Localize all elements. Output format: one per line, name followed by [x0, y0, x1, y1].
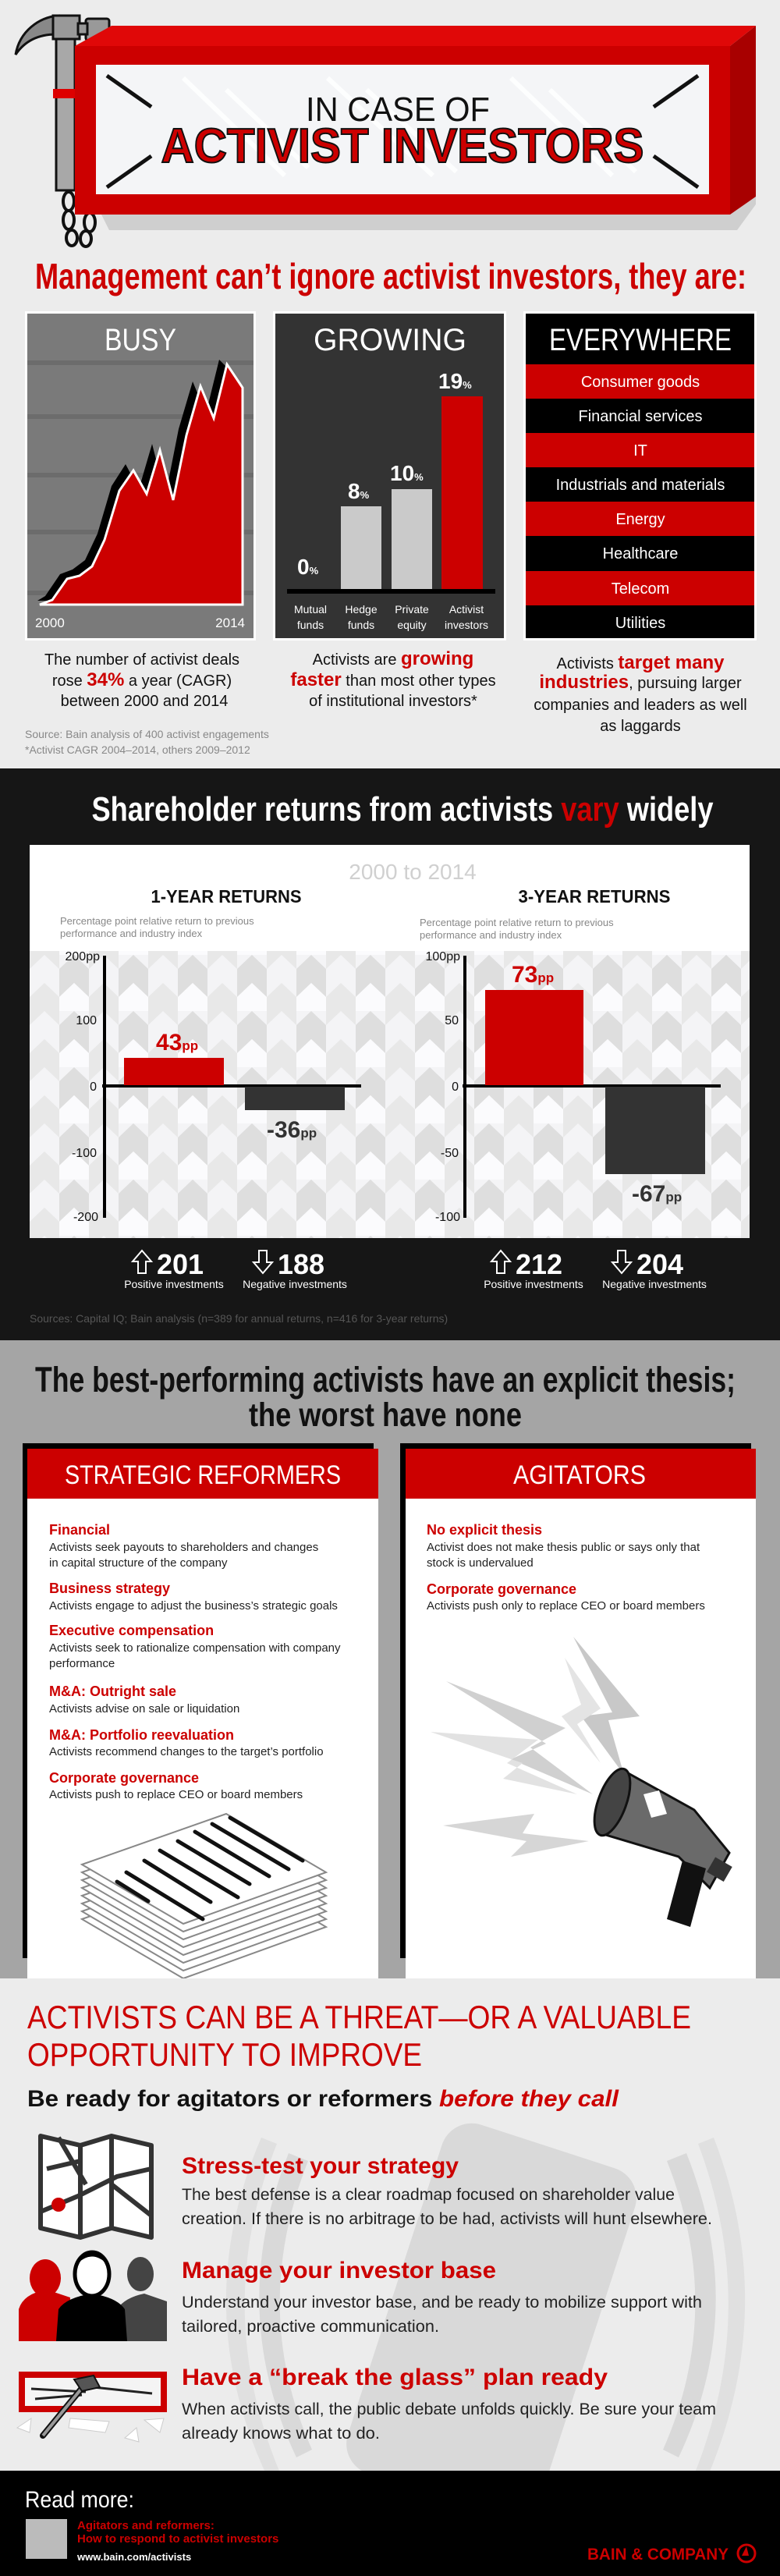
background: action section	[0, 1978, 780, 2471]
subheading: be ready: Be ready for agitators or reformers before they call	[27, 2086, 619, 2112]
list: reformer theses: Activists push to replace CEO or board members	[49, 1788, 303, 1801]
item: manage investor base: Manage your investor base	[182, 2258, 496, 2283]
chart: 3-year returns: 73pp	[512, 962, 554, 988]
item: stress-test: Stress-test your strategy	[182, 2153, 459, 2179]
icon: stack of papers	[82, 1814, 326, 1978]
chart: 1-year returns: 43pp	[156, 1030, 198, 1056]
footer	[0, 2471, 780, 2576]
icon: lightning bolts	[431, 1637, 640, 1857]
chart: 1-year returns: 0	[90, 1080, 97, 1094]
list: industries	[526, 364, 754, 632]
heading: threat or opportunity: OPPORTUNITY TO IMPROVE	[27, 2036, 422, 2073]
chart: 3-year returns: -50	[441, 1147, 459, 1160]
chart: 3-year returns: -100	[435, 1211, 460, 1224]
icon: megaphone	[587, 1765, 732, 1927]
stats: investment counts: 212	[516, 1248, 562, 1280]
source note: top	[25, 728, 269, 756]
bar chart: growth by investor type: 8%	[348, 479, 370, 503]
stats: investment counts: Positive investments	[124, 1278, 224, 1290]
item: stress-test: The best defense is a clear roadmap focused on shareholder value	[182, 2186, 675, 2204]
background: returns section	[0, 768, 780, 1340]
caption: busy: The number of activist deals	[44, 651, 239, 669]
caption: busy: rose 34% a year (CAGR)	[52, 669, 232, 690]
heading: everywhere: EVERYWHERE	[549, 323, 732, 357]
list: reformer theses: Executive compensation	[49, 1623, 214, 1638]
list: industries: IT	[633, 442, 647, 459]
list: agitator traits: Activists push only to replace CEO or board members	[427, 1599, 705, 1613]
footer: Read more:	[25, 2487, 134, 2513]
caption: growing: of institutional investors*	[309, 693, 477, 710]
caption: everywhere: Activists target many	[557, 652, 725, 673]
list: industries: Financial services	[579, 408, 702, 425]
icon: people	[19, 2251, 167, 2341]
item: break the glass: already knows what to do.	[182, 2425, 380, 2443]
stats: investment counts: Negative investments	[602, 1278, 707, 1290]
item: break the glass	[182, 2365, 716, 2443]
list: reformer theses: Activists engage to adjust the business’s strategic goals	[49, 1599, 338, 1613]
chart: 3-year returns: 3-YEAR RETURNS	[518, 886, 671, 907]
item: manage investor base: tailored, proactive communication.	[182, 2318, 439, 2336]
watermark: phone	[226, 2115, 745, 2527]
chart: 1-year returns: -36pp	[267, 1117, 317, 1143]
bar chart: growth by investor type: 10%	[390, 461, 424, 485]
title line 1: IN CASE OF	[306, 90, 490, 129]
caption: everywhere: industries, pursuing larger	[539, 672, 742, 693]
bar chart: growth by investor type: 0%	[297, 555, 319, 579]
heading: threat or opportunity: ACTIVISTS CAN BE A THREAT—OR A VALUABLE	[27, 1999, 691, 2035]
list: reformer theses: Activists recommend changes to the target’s portfolio	[49, 1745, 324, 1758]
item: manage investor base	[182, 2258, 702, 2336]
chart: 1-year returns: -100	[72, 1147, 97, 1160]
heading: shareholder returns: Shareholder returns from activists vary widely	[92, 790, 714, 829]
panel: busy: 2014	[215, 616, 245, 630]
source note: returns: Sources: Capital IQ; Bain analysis (n=389 for annual returns, n=416 for 3-year returns)	[30, 1312, 448, 1325]
heading: best-performing activists	[35, 1360, 736, 1434]
list: industries: Utilities	[615, 615, 665, 632]
stats: investment counts: 188	[278, 1248, 324, 1280]
panel: agitators: AGITATORS	[513, 1460, 646, 1490]
title sign: in case of activist investors	[75, 26, 756, 230]
title line 2: ACTIVIST INVESTORS	[161, 119, 644, 173]
icon: break the glass	[17, 2372, 167, 2442]
bar chart: growth by investor type: investors	[445, 619, 488, 631]
chart: 3-year returns: 100pp	[426, 950, 460, 963]
link text: Agitators and reformers:	[77, 2519, 214, 2532]
stats: investment counts: 201	[157, 1248, 204, 1280]
chart: 1-year returns: -200	[73, 1211, 98, 1224]
list: agitator traits: stock is undervalued	[427, 1556, 534, 1570]
icon: map	[41, 2136, 151, 2237]
item: break the glass: Have a “break the glass” plan ready	[182, 2365, 608, 2390]
bar chart: growth by investor type	[287, 369, 495, 631]
panel: strategic reformers: STRATEGIC REFORMERS	[65, 1460, 341, 1490]
caption: everywhere	[534, 652, 747, 735]
panel: agitators	[400, 1443, 756, 1979]
list: industries: Telecom	[612, 580, 669, 598]
caption: busy: between 2000 and 2014	[61, 693, 228, 710]
item: manage investor base: Understand your investor base, and be ready to mobilize support with	[182, 2294, 702, 2312]
list: reformer theses: Activists seek to rationalize compensation with company	[49, 1641, 341, 1655]
background: thesis section	[0, 1340, 780, 1978]
background: top section	[0, 0, 780, 768]
thumbnail	[26, 2519, 67, 2559]
chart: 1-year returns: Percentage point relative return to previous	[60, 915, 254, 927]
link text	[76, 2519, 278, 2563]
chart: 3-year returns: Percentage point relative return to previous	[420, 917, 614, 928]
list: reformer theses: Corporate governance	[49, 1770, 199, 1786]
list: reformer theses: M&A: Outright sale	[49, 1684, 176, 1699]
list: reformer theses: Financial	[49, 1522, 110, 1538]
area chart: activist deals	[37, 360, 243, 605]
panel: everywhere	[523, 311, 757, 640]
list: industries: Consumer goods	[581, 374, 700, 391]
list: reformer theses	[49, 1522, 341, 1801]
chart: 3-year returns: 50	[445, 1014, 459, 1027]
stats: investment counts: Positive investments	[484, 1278, 583, 1290]
chart: 1-year returns: performance and industry index	[60, 928, 203, 939]
caption: everywhere: as laggards	[600, 718, 681, 735]
list: industries: Industrials and materials	[556, 477, 725, 494]
list: agitator traits: Corporate governance	[427, 1581, 576, 1597]
caption: growing: Activists are growing	[313, 648, 473, 669]
list: industries: Healthcare	[603, 545, 678, 562]
chart: 1-year returns: 1-YEAR RETURNS	[151, 886, 301, 907]
panel: strategic reformers	[23, 1443, 378, 1979]
list: reformer theses: M&A: Portfolio reevaluation	[49, 1727, 234, 1743]
caption: growing	[290, 648, 496, 710]
caption: busy	[44, 651, 239, 710]
list: agitator traits	[427, 1522, 705, 1613]
link text: www.bain.com/activists	[76, 2551, 191, 2563]
item: stress-test: creation. If there is no arbitrage to be had, activists will hunt elsewhere.	[182, 2210, 712, 2228]
link text: How to respond to activist investors	[77, 2532, 278, 2546]
bar chart: growth by investor type: funds	[348, 619, 374, 631]
chart: 1-year returns	[60, 886, 361, 1224]
chart: 1-year returns: 100	[76, 1014, 97, 1027]
panel: returns chart	[30, 845, 750, 1238]
heading: busy: BUSY	[105, 323, 176, 357]
heading: threat or opportunity	[27, 1999, 691, 2073]
heading: best-performing activists: the worst have none	[249, 1396, 522, 1434]
item: stress-test	[182, 2153, 712, 2228]
panel: busy	[25, 311, 256, 640]
chart: 3-year returns	[420, 886, 721, 1224]
bar chart: growth by investor type: Activist	[449, 603, 484, 616]
source note: top: Source: Bain analysis of 400 activist engagements	[25, 728, 269, 740]
source note: top: *Activist CAGR 2004–2014, others 2009–2012	[25, 743, 250, 756]
item: break the glass: When activists call, the public debate unfolds quickly. Be sure your team	[182, 2400, 716, 2418]
chart: 3-year returns: -67pp	[632, 1181, 682, 1207]
chart: 3-year returns: 0	[452, 1080, 459, 1094]
bar chart: growth by investor type: Mutual	[294, 603, 327, 616]
list: industries: Energy	[615, 511, 665, 528]
panel: growing	[273, 311, 506, 640]
heading: growing: GROWING	[314, 323, 466, 357]
label: period: 2000 to 2014	[349, 860, 477, 884]
bar chart: growth by investor type: Hedge	[345, 603, 378, 616]
bar chart: growth by investor type: funds	[297, 619, 324, 631]
list: reformer theses: in capital structure of the company	[49, 1556, 228, 1570]
list: agitator traits: No explicit thesis	[427, 1522, 542, 1538]
bar chart: growth by investor type: equity	[397, 619, 427, 631]
icon: hammer and chain	[16, 16, 109, 247]
list: agitator traits: Activist does not make thesis public or says only that	[427, 1541, 700, 1554]
chart: 1-year returns: 200pp	[66, 950, 100, 963]
list: reformer theses: Activists advise on sale or liquidation	[49, 1702, 239, 1716]
stats: investment counts: Negative investments	[243, 1278, 347, 1290]
caption: growing: faster than most other types	[290, 669, 496, 690]
list: reformer theses: Activists seek payouts to shareholders and changes	[49, 1541, 318, 1554]
logo: bain & company: BAIN & COMPANY	[587, 2546, 729, 2564]
caption: everywhere: companies and leaders as well	[534, 697, 747, 714]
bar chart: growth by investor type: Private	[395, 603, 429, 616]
list: reformer theses: performance	[49, 1657, 115, 1670]
list: reformer theses: Business strategy	[49, 1581, 170, 1596]
stats: investment counts: 204	[636, 1248, 683, 1280]
bar chart: growth by investor type: 19%	[438, 369, 472, 393]
chart: 3-year returns: performance and industry index	[420, 929, 562, 941]
stats: investment counts	[124, 1248, 707, 1290]
panel: busy: 2000	[35, 616, 65, 630]
